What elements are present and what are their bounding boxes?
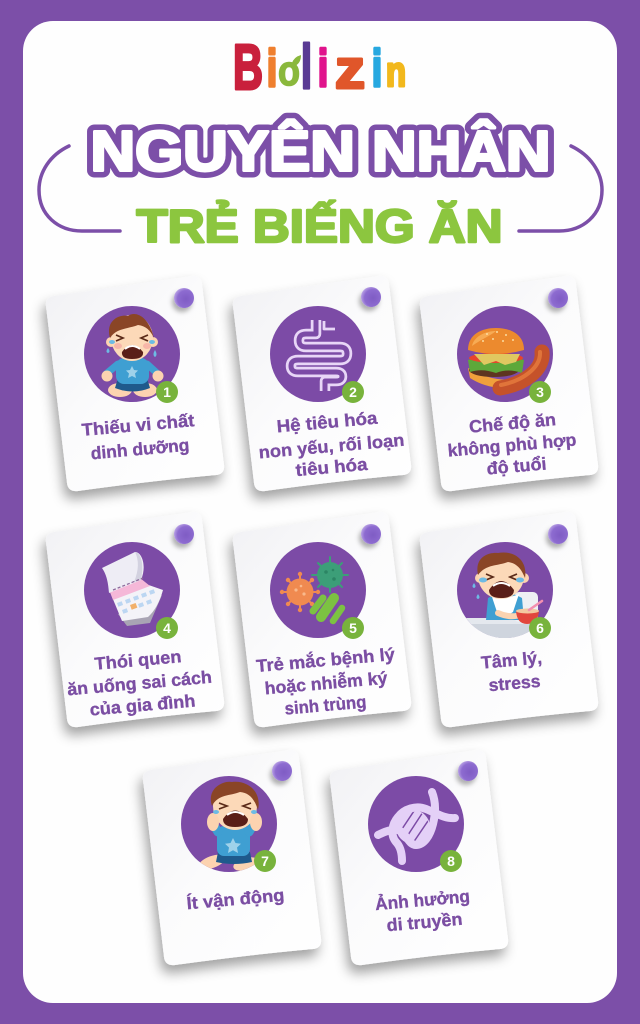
- number badge 3: 3: [536, 384, 544, 400]
- number badge 2: 2: [349, 384, 357, 400]
- label: của gia đình: [89, 690, 196, 720]
- heading: TRẺ BIẾNG ĂN: TRẺ BIẾNG ĂN: [136, 200, 503, 252]
- pin: [174, 524, 194, 544]
- icon circle: [457, 306, 553, 402]
- number badge 2: [342, 381, 364, 403]
- left bracket: [39, 146, 120, 231]
- pin: [174, 288, 194, 308]
- paper: [46, 276, 224, 491]
- paper: [46, 512, 224, 727]
- icon circle: [270, 306, 366, 402]
- label: Thiếu vi chất: [81, 410, 195, 440]
- label: Chế độ ăn: [468, 409, 557, 437]
- logo: Biolizin: i: [318, 40, 328, 98]
- label: Tâm lý,: [480, 647, 543, 673]
- pin: [548, 524, 568, 544]
- icon circle: [457, 542, 553, 638]
- logo: Biolizin: o: [278, 47, 300, 94]
- paper: [330, 750, 508, 965]
- label: [81, 410, 195, 463]
- label: [374, 885, 471, 935]
- label: ăn uống sai cách: [66, 667, 213, 699]
- label: Ít vận động: [186, 884, 285, 913]
- pin: [361, 524, 381, 544]
- label: Hệ tiêu hóa: [276, 408, 378, 436]
- number badge 5: 5: [349, 620, 357, 636]
- label: Thói quen: [94, 646, 182, 674]
- number badge 5: [342, 617, 364, 639]
- card 6: [420, 512, 598, 727]
- logo: Biolizin: i: [372, 40, 382, 98]
- number badge 6: 6: [536, 620, 544, 636]
- icon: calendar: [102, 552, 163, 626]
- paper: [420, 276, 598, 491]
- number badge 4: [156, 617, 178, 639]
- label: di truyền: [386, 909, 463, 935]
- number badge 1: 1: [163, 384, 171, 400]
- number badge 7: [254, 850, 276, 872]
- logo: Biolizin: l: [301, 33, 312, 102]
- logo: Biolizin: n: [386, 48, 406, 95]
- label: [66, 646, 213, 720]
- number badge 7: 7: [261, 853, 269, 869]
- logo: Biolizin: z: [335, 38, 365, 100]
- number badge 3: [529, 381, 551, 403]
- icon circle: [84, 306, 180, 402]
- icon circle: [270, 542, 366, 638]
- card 7: [143, 750, 321, 965]
- number badge 8: [440, 850, 462, 872]
- card 1: [46, 276, 224, 491]
- pin: [548, 288, 568, 308]
- label: [480, 647, 543, 695]
- pin: [272, 761, 292, 781]
- icon: burger and sausage: [468, 328, 542, 388]
- pin: [458, 761, 478, 781]
- card 5: [233, 512, 411, 727]
- label: Ảnh hưởng: [374, 885, 471, 914]
- icon: germs: [280, 557, 348, 621]
- label: tiêu hóa: [295, 454, 368, 480]
- paper: [143, 750, 321, 965]
- logo leaf: [292, 55, 301, 66]
- label: độ tuổi: [486, 453, 547, 479]
- label: stress: [488, 671, 542, 695]
- icon circle: [181, 776, 277, 872]
- icon: crying baby holding head: [197, 782, 262, 873]
- label: [258, 408, 405, 480]
- icon: crying baby sitting: [102, 314, 164, 397]
- icon: DNA helix: [378, 792, 455, 861]
- heading: NGUYÊN NHÂN: NGUYÊN NHÂN: [90, 118, 550, 184]
- icon circle: [84, 542, 180, 638]
- number badge 6: [529, 617, 551, 639]
- card 8: [330, 750, 508, 965]
- number badge 8: 8: [447, 853, 455, 869]
- number badge 1: [156, 381, 178, 403]
- card 2: [233, 276, 411, 491]
- logo: Biolizin: i: [267, 40, 277, 98]
- paper: [233, 512, 411, 727]
- logo: Biolizin: [233, 31, 406, 103]
- icon: crying baby in high chair: [466, 552, 544, 638]
- heading: NGUYÊN NHÂN: NGUYÊN NHÂN: [90, 118, 550, 184]
- icon circle: [368, 776, 464, 872]
- paper: [420, 512, 598, 727]
- label: không phù hợp: [447, 429, 577, 461]
- card 3: [420, 276, 598, 491]
- logo: Biolizin: B: [233, 31, 263, 103]
- label: [255, 643, 396, 719]
- label: [447, 409, 577, 479]
- number badge 4: 4: [163, 620, 171, 636]
- label: dinh dưỡng: [90, 435, 190, 463]
- right bracket: [519, 146, 602, 231]
- label: sinh trùng: [284, 691, 367, 719]
- paper: [233, 276, 411, 491]
- icon: intestine: [291, 318, 347, 393]
- pin: [361, 287, 381, 307]
- card 4: [46, 512, 224, 727]
- label: hoặc nhiễm ký: [264, 667, 388, 698]
- label: non yếu, rối loạn: [258, 430, 405, 462]
- label: Trẻ mắc bệnh lý: [255, 643, 396, 676]
